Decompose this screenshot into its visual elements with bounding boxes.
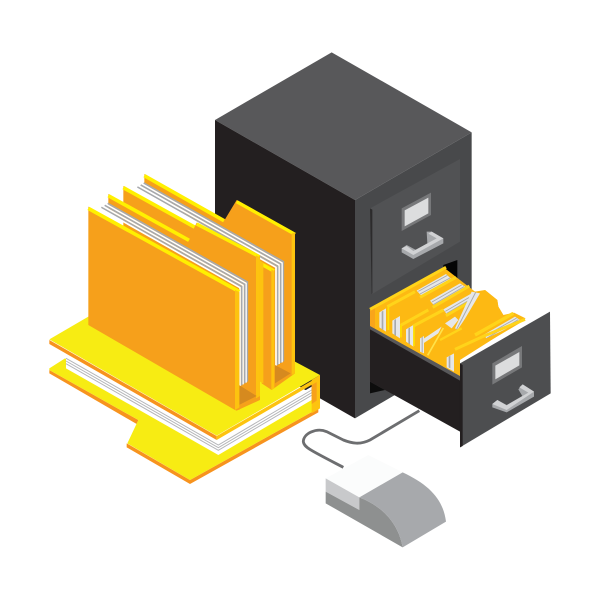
computer mouse [326,455,446,547]
book pages [66,355,312,455]
front folder pages [100,203,247,386]
book back cover [49,358,318,484]
back folder [123,174,295,390]
back folder pages [136,183,283,366]
open drawer slot [443,260,457,285]
drawer front panel [460,312,551,447]
drawer label [492,346,522,385]
filed folders [370,267,525,376]
file cabinet body [215,52,472,418]
drawer handle [402,232,443,259]
book front cover [49,317,320,440]
front folder [88,194,260,411]
drawer handle [492,384,534,412]
book spine [312,375,320,413]
drawer back fill [370,268,526,376]
shadow under drawer [370,382,385,393]
mouse cable [303,411,419,467]
white strip of open folder [455,292,480,330]
drawer side [370,326,460,432]
folders on book [49,174,320,484]
open drawer [370,267,551,447]
upper drawer front [370,159,460,294]
drawer label [402,193,431,231]
